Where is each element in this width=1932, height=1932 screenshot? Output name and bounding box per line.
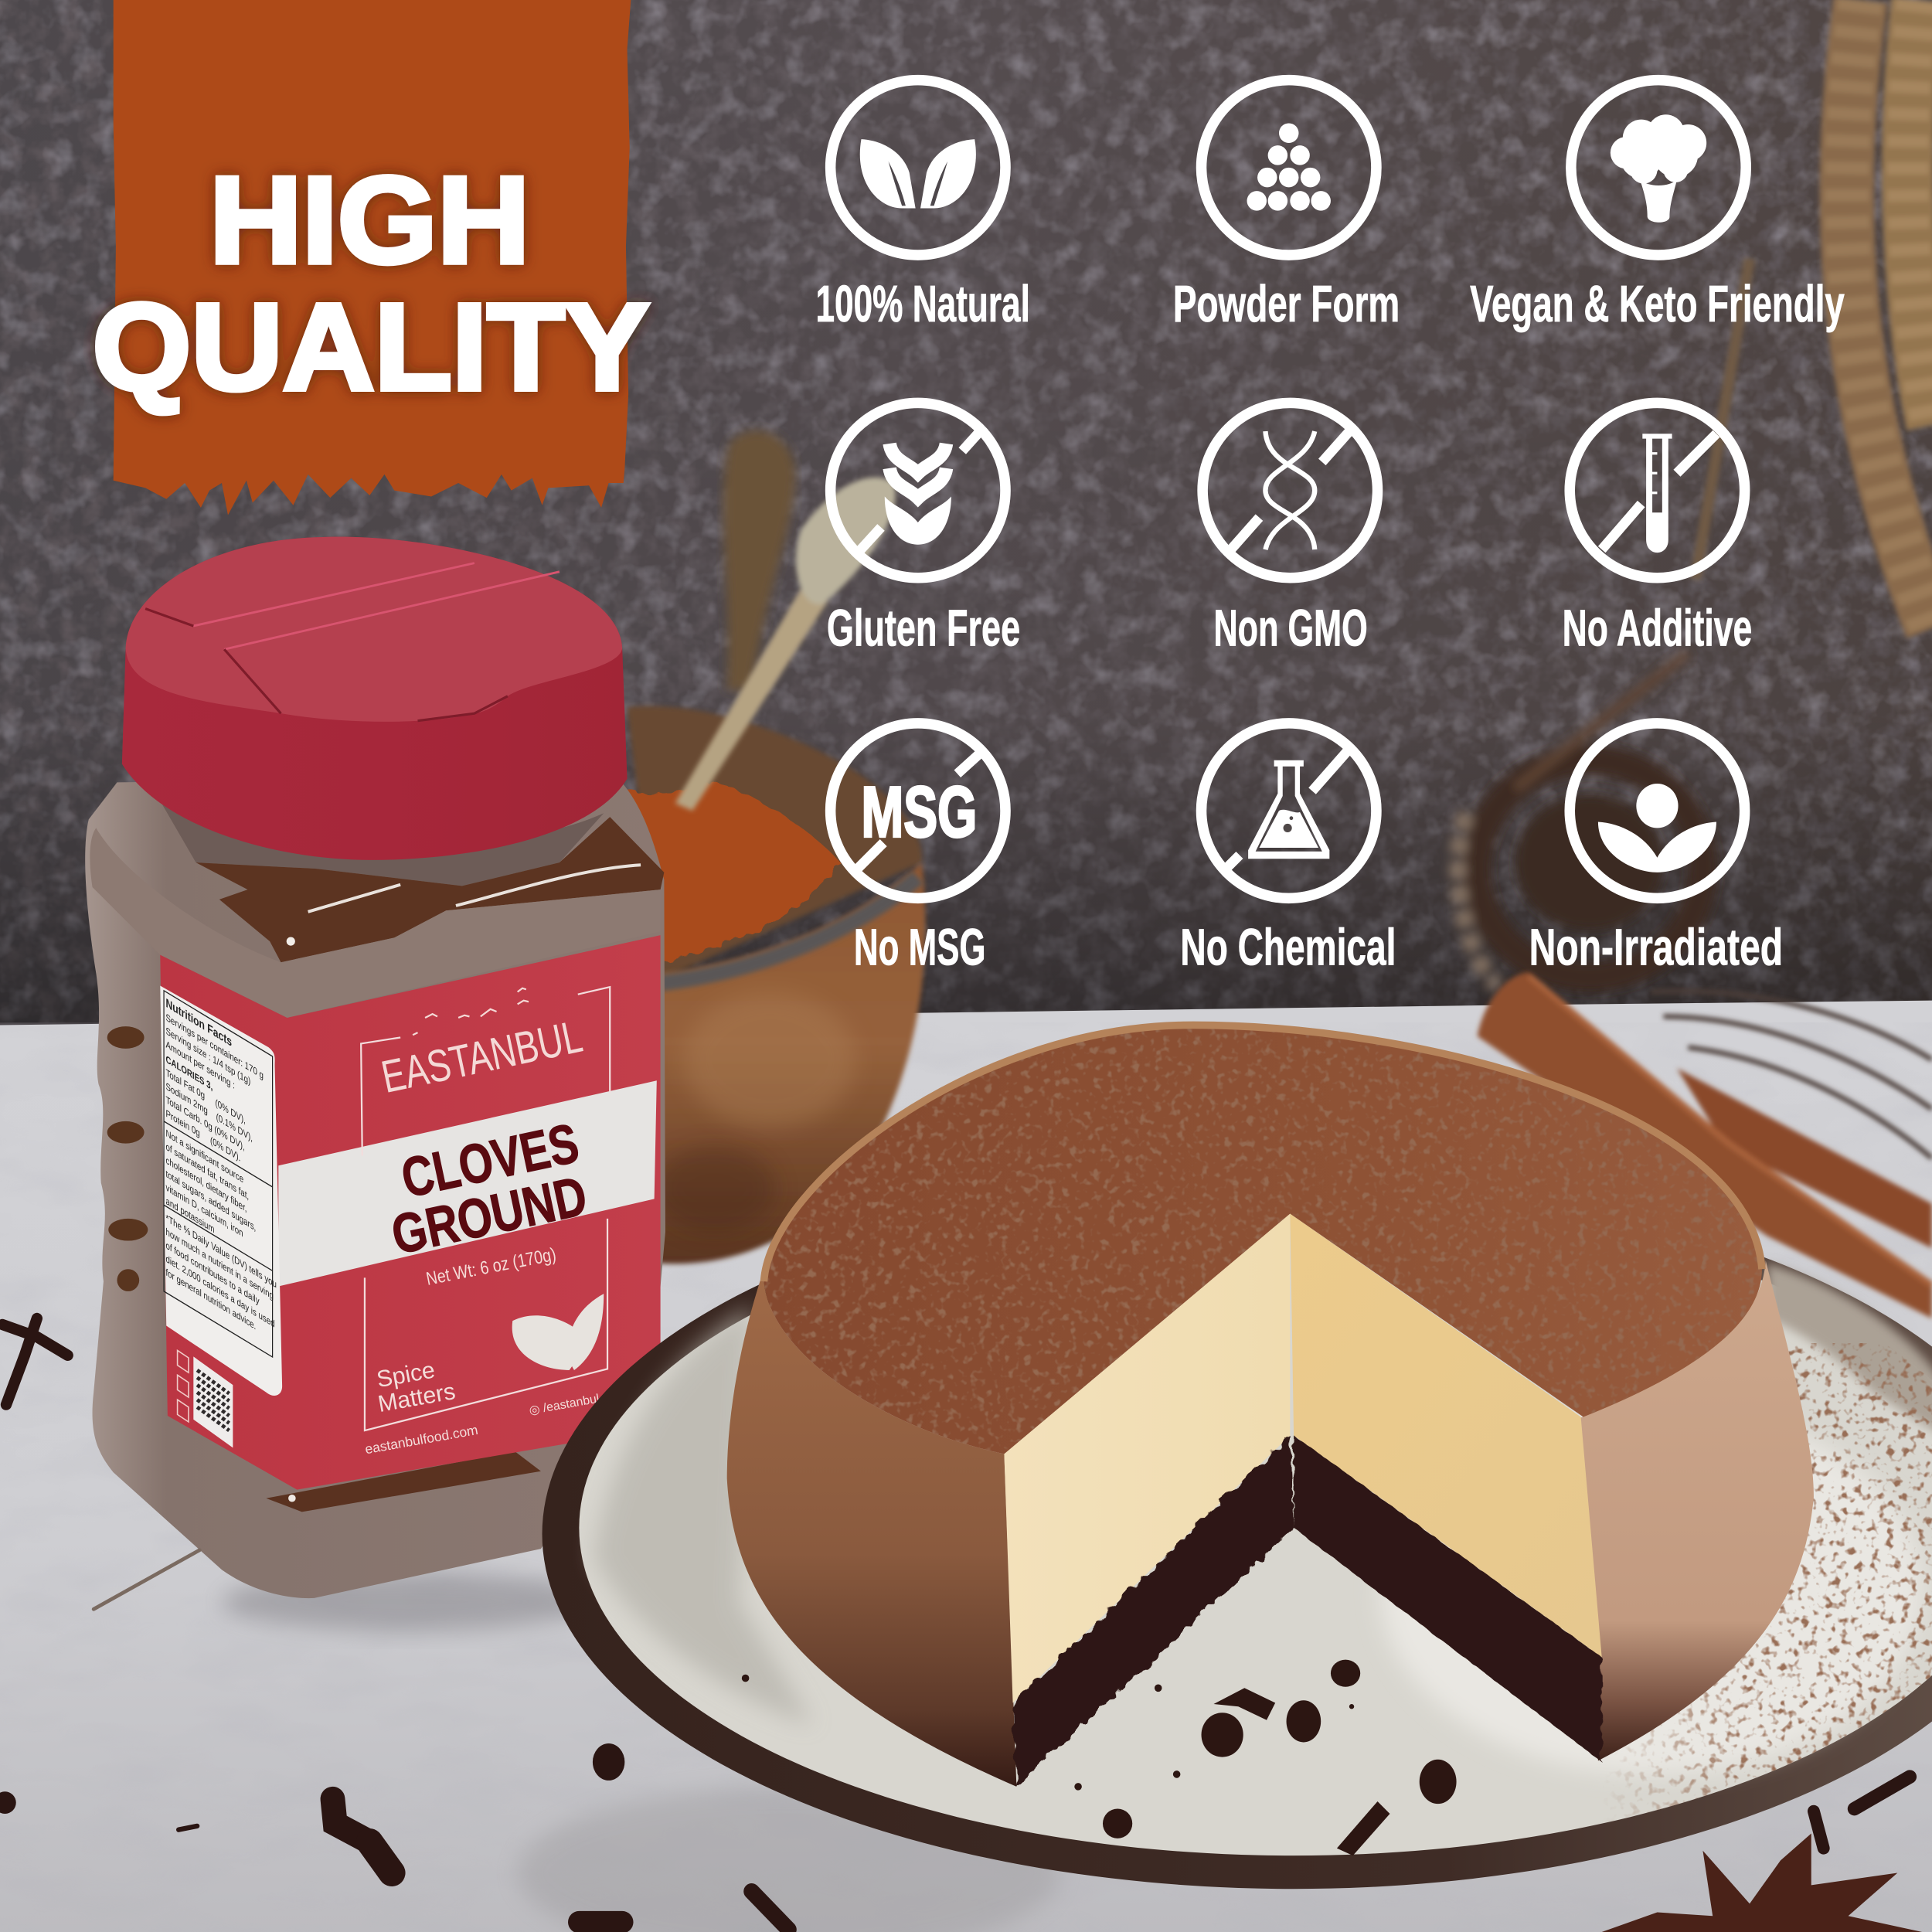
nutrition text: Sodium 2mg (0.1% DV), [165,1080,253,1145]
bowl outer [653,862,925,1264]
product jar [85,537,665,1598]
net weight: Net Wt: 6 oz (170g) [424,1244,558,1290]
label: No Additive [1563,599,1752,657]
nutrition text: Total Fat 0g (0% DV), [165,1066,246,1126]
nutrition text: CALORIES 3, [165,1053,213,1093]
crust [1013,1435,1602,1787]
feature: Non GMO [1202,403,1378,657]
lid [122,537,628,860]
feature: No MSG [831,723,1005,976]
product name: GROUND [386,1165,592,1267]
nutrition text: vitamin D, calcium, iron [165,1181,243,1240]
instagram: ◎ /eastanbul [528,1393,600,1417]
icon: crossed test tube [1570,403,1745,578]
icon: crossed flask [1202,723,1376,898]
background: marble table [0,1001,1932,1932]
star anise [1602,1833,1922,1932]
label: Powder Form [1173,275,1400,333]
title: HIGH QUALITY: HIGH [209,151,530,289]
feature: No Chemical [1180,723,1396,976]
nutrition text: Not a significant source [165,1127,243,1185]
jar shoulder powder [196,817,664,962]
nutrition text: of food contributes to a daily [165,1239,260,1307]
fork tines [1651,991,1932,1158]
plate [543,1179,1932,1889]
recycling marks [178,1350,189,1422]
icon: crossed MSG [831,723,1005,898]
main label [160,935,661,1490]
whisk [1458,653,1702,986]
icon: crossed MSG: MSG [861,772,977,852]
powder mound [616,782,840,962]
nutrition text: Total Carb. 0g (0% DV), [165,1094,245,1153]
Spice Matters: Matters [376,1379,457,1417]
product name [386,1112,592,1267]
cake right side [1573,1260,1814,1760]
label: Non GMO [1213,599,1368,657]
crumbs and cloves on plate [742,1660,1457,1855]
icon: powder particles [1202,80,1376,255]
jar bottom powder line [266,1451,541,1512]
nutrition text: how much a nutrient in a serving [165,1226,274,1302]
product name: CLOVES [396,1112,584,1209]
label: No Chemical [1180,918,1396,976]
jar lower shoulder [90,828,661,1018]
feature: 100% Natural [815,80,1030,333]
label leaves [512,1294,604,1370]
nutrition text: of saturated fat, trans fat, [165,1141,249,1202]
right cut face [1290,1213,1602,1657]
nutrition text: Nutrition Facts [165,996,232,1049]
jar neck under lid [160,801,604,886]
label: Non-Irradiated [1529,918,1783,976]
nutrition text: *The % Daily Value (DV) tells you [165,1212,277,1291]
icon: broccoli [1571,80,1746,255]
rope [1696,0,1932,628]
icon: plant [1570,723,1745,898]
title: HIGH QUALITY [93,151,649,416]
QR code [193,1356,233,1447]
nutrition text: Amount per serving : [165,1038,235,1091]
bowl interior [628,706,922,980]
lid seams [193,563,560,649]
jar body [85,776,665,1598]
nutrition text: Protein 0g (0% DV). [165,1107,240,1164]
background: textured stone wall [0,0,1932,1022]
wooden spoon behind bowl [723,430,795,690]
copper bowl of ground cloves [616,706,925,1264]
Spice Matters [375,1358,457,1417]
nutrition text: diet. 2,000 calories a day is used [165,1253,274,1330]
orange banner [114,0,631,515]
icon: crossed wheat [831,403,1005,578]
website: eastanbulfood.com [364,1422,479,1457]
icon: crossed DNA [1202,403,1378,578]
feature: Gluten Free [827,403,1020,657]
nutrition text: cholesterol, dietary fiber, [165,1154,247,1215]
title: HIGH QUALITY: QUALITY [93,278,649,416]
jar side ridges [107,1026,148,1291]
icon: leaves [831,80,1005,255]
nutrition text: total sugars, added sugars, [165,1168,256,1233]
cheesecake [727,1010,1814,1787]
cocoa dust on plate [1602,1343,1932,1849]
feature: No Additive [1563,403,1752,657]
label white band [278,1080,657,1287]
nutrition facts panel [160,986,282,1396]
nutrition text: Servings per container: 170 g [165,1011,264,1082]
label: Gluten Free [827,599,1020,657]
Spice Matters: Spice [375,1358,437,1393]
spoon in bowl [675,478,896,811]
feature: Powder Form [1173,80,1400,333]
label: No MSG [854,918,986,976]
cake left side [727,1269,1016,1787]
label: 100% Natural [815,275,1030,333]
nutrition text: and potassium [165,1195,214,1236]
lid top face [126,537,622,722]
brand birds [413,988,529,1035]
cinnamon sticks [1478,972,1932,1318]
feature: Vegan & Keto Friendly [1470,80,1845,333]
left cut face [1004,1213,1290,1702]
bowl rim [661,877,918,983]
nutrition text: Serving size : 1/4 tsp (1g) [165,1025,250,1087]
brand: EASTANBUL [377,1011,587,1103]
label frame [361,987,610,1430]
nutrition text [164,991,277,1359]
jar shoulder highlight [308,865,641,912]
scattered cloves on table [0,1318,1910,1930]
nutrition text: for general nutrition advice. [165,1266,256,1332]
feature: Non-Irradiated [1529,723,1783,976]
cake top with cocoa [740,1010,1787,1466]
